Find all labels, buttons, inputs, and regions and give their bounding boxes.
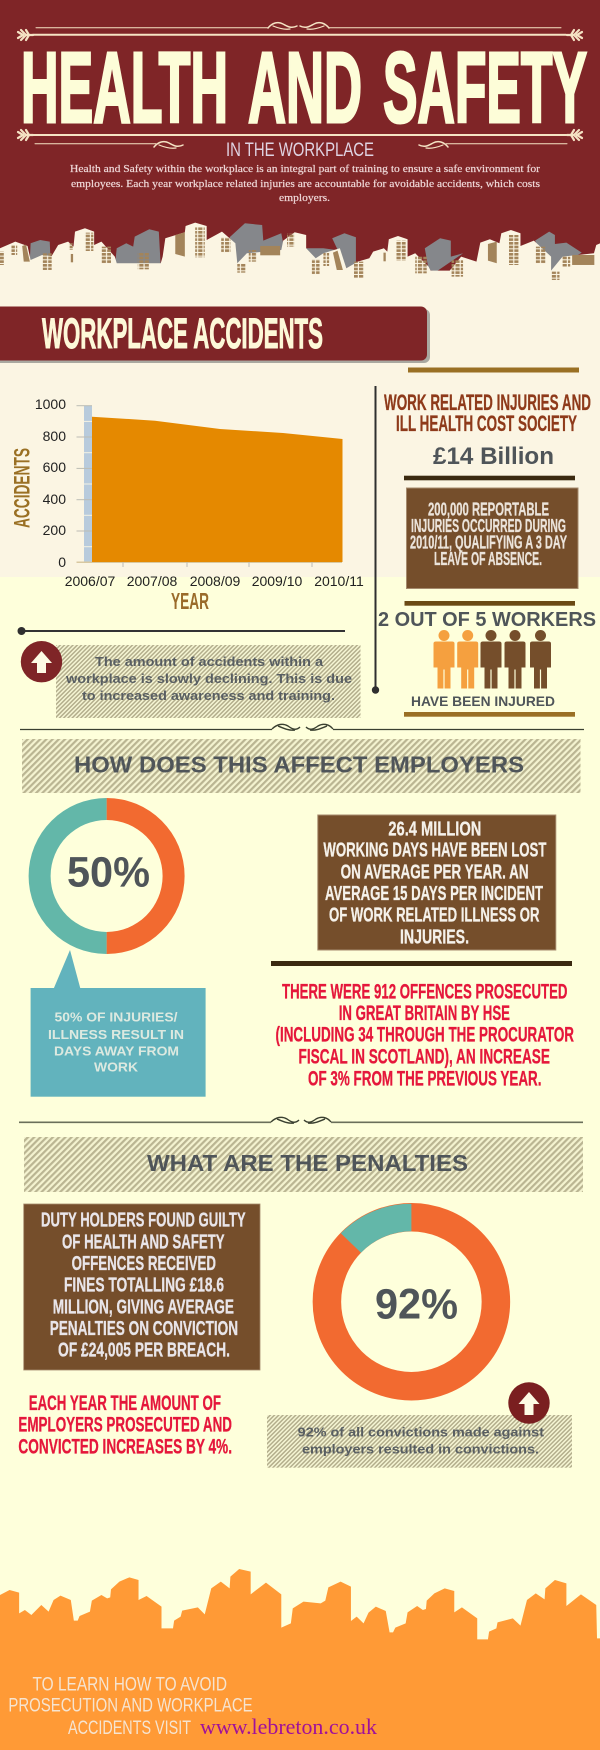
- footer call to action: [8, 1675, 377, 1739]
- red text: prosecutions increase: EMPLOYERS PROSECUTED AND: [18, 1414, 232, 1437]
- y axis labels: [35, 396, 66, 570]
- gold rule: [408, 368, 579, 372]
- intro text: employees. Each year workplace related injuries are accountable for avoidable accidents, which costs: [71, 178, 540, 190]
- dark rule: [404, 476, 575, 480]
- x axis labels: 2010/11: [314, 573, 364, 589]
- callout: days away from work: DAYS AWAY FROM: [54, 1044, 179, 1058]
- callout text: workplace is slowly declining. This is due: [65, 671, 352, 686]
- section heading: what are the penalties: [24, 1137, 583, 1192]
- top ornament: [18, 23, 582, 40]
- callout: accidents declining: [21, 641, 361, 718]
- stat: 2 out of 5 workers: 2 OUT OF 5 WORKERS: [378, 609, 596, 631]
- callout: days away from work: ILLNESS RESULT IN: [48, 1027, 184, 1042]
- callout: convictions: [267, 1382, 572, 1468]
- footer call to action: ACCIDENTS VISIT: [68, 1718, 191, 1739]
- x axis labels: 2008/09: [190, 573, 241, 589]
- callout: days away from work: 50% OF INJURIES/: [54, 1010, 178, 1025]
- panel: fines: OFFENCES RECEIVED: [72, 1253, 216, 1275]
- panel: working days lost: [318, 815, 556, 950]
- banner heading: WORKPLACE ACCIDENTS: [42, 310, 323, 358]
- panel: working days lost: INJURIES.: [400, 926, 469, 948]
- divider: [20, 724, 584, 730]
- x axis labels: 2009/10: [252, 573, 303, 589]
- callout text: [298, 1425, 545, 1456]
- panel: working days lost: 26.4 MILLION: [388, 819, 481, 841]
- red text: prosecutions increase: [18, 1392, 232, 1458]
- donut chart: 50 percent: 50%: [67, 849, 150, 897]
- bottom ornament: [18, 130, 582, 148]
- subtitle: IN THE WORKPLACE: [226, 140, 374, 161]
- header panel: [0, 0, 600, 290]
- brown rule: [404, 601, 575, 606]
- y axis labels: 1000: [35, 396, 66, 412]
- y axis title: ACCIDENTS: [10, 448, 34, 528]
- y axis labels: 800: [43, 428, 66, 444]
- callout text: The amount of accidents within a: [95, 654, 324, 669]
- stat: 14 billion: £14 Billion: [433, 443, 554, 470]
- footer call to action: PROSECUTION AND WORKPLACE: [8, 1696, 253, 1717]
- divider: [19, 1117, 583, 1123]
- panel: fines: PENALTIES ON CONVICTION: [50, 1318, 238, 1340]
- x axis labels: [65, 573, 364, 589]
- donut chart: 50 percent: [29, 798, 185, 954]
- section heading: how does this affect employers: HOW DOES THIS AFFECT EMPLOYERS: [74, 752, 524, 778]
- intro text: Health and Safety within the workplace is an integral part of training to ensure a safe environment for: [70, 163, 540, 175]
- vertical timeline: [372, 386, 379, 694]
- x axis labels: 2007/08: [127, 573, 178, 589]
- label: have been injured: HAVE BEEN INJURED: [411, 693, 555, 709]
- callout text: 92% of all convictions made against: [298, 1425, 545, 1440]
- donut chart: 92 percent: [327, 1204, 496, 1386]
- cost heading: [384, 390, 591, 436]
- x axis labels: 2006/07: [65, 573, 116, 589]
- y axis labels: 400: [43, 491, 66, 507]
- red text: offences prosecuted: [276, 980, 574, 1091]
- panel: fines: FINES TOTALLING £18.6: [64, 1275, 224, 1297]
- y axis labels: 600: [43, 459, 66, 475]
- title: HEALTH: [21, 32, 228, 144]
- callout: days away from work: [31, 950, 206, 1097]
- red text: prosecutions increase: CONVICTED INCREASES BY 4%.: [18, 1435, 232, 1458]
- callout text: [65, 654, 352, 703]
- red text: prosecutions increase: EACH YEAR THE AMOUNT OF: [29, 1392, 221, 1415]
- panel: fines: OF £24,005 PER BREACH.: [58, 1340, 230, 1362]
- panel: fines: MILLION, GIVING AVERAGE: [53, 1296, 234, 1318]
- icon: five workers: [434, 630, 551, 688]
- icon: up arrow: [21, 641, 62, 682]
- x axis title: YEAR: [171, 588, 209, 614]
- y axis labels: 200: [43, 522, 66, 538]
- panel: fines: OF HEALTH AND SAFETY: [62, 1231, 225, 1253]
- section heading: what are the penalties: WHAT ARE THE PENALTIES: [147, 1150, 468, 1176]
- panel: reportable injuries: [406, 488, 578, 588]
- title: AND: [248, 32, 362, 144]
- intro text: employers.: [279, 192, 330, 204]
- y axis labels: 0: [58, 554, 66, 570]
- callout: days away from work: WORK: [94, 1060, 139, 1075]
- dark rule: [271, 961, 572, 966]
- footer skyline: [0, 1569, 600, 1750]
- icon: up arrow: [508, 1382, 550, 1424]
- callout text: employers resulted in convictions.: [302, 1441, 539, 1456]
- section heading: how does this affect employers: [22, 739, 580, 793]
- banner: workplace accidents: [0, 306, 430, 363]
- panel: fines: [24, 1204, 260, 1370]
- link: website: www.lebreton.co.uk: [200, 1714, 377, 1739]
- timeline rule: [18, 627, 345, 635]
- footer call to action: TO LEARN HOW TO AVOID: [32, 1675, 227, 1696]
- area chart: accidents per year: [10, 396, 364, 614]
- gold rule: [404, 712, 575, 717]
- panel: fines: DUTY HOLDERS FOUND GUILTY: [41, 1210, 246, 1232]
- callout text: to increased awareness and training.: [82, 688, 335, 703]
- intro text: [70, 163, 540, 204]
- skyline: header: [0, 223, 600, 300]
- donut chart: 92 percent: 92%: [375, 1280, 458, 1328]
